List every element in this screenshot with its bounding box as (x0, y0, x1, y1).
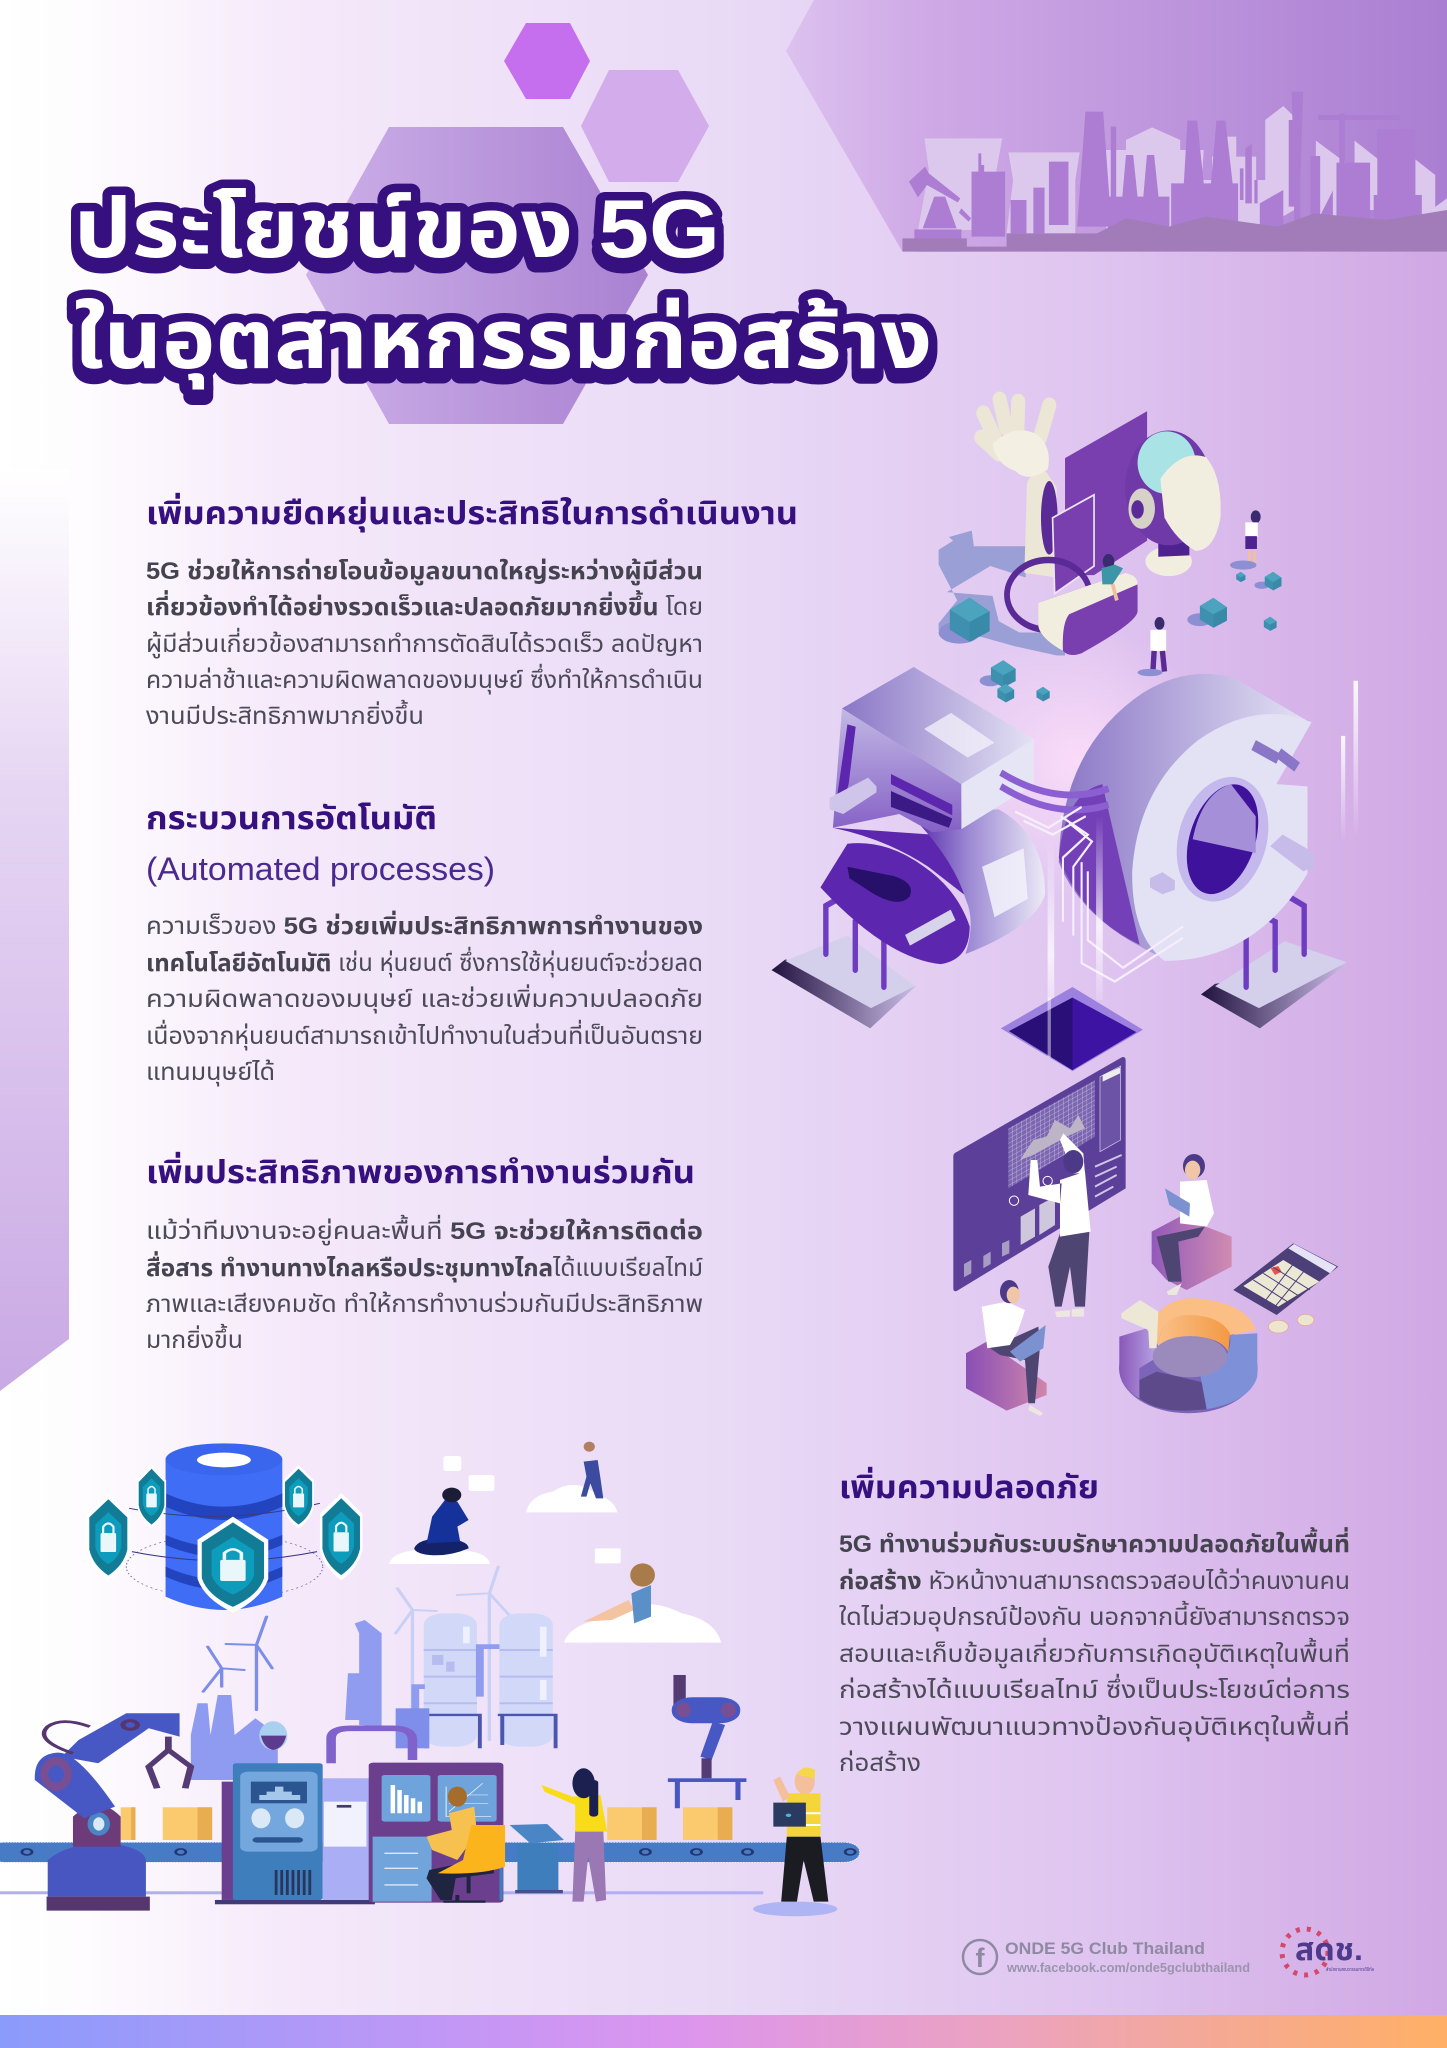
section 3 body: มากยิ่งขึ้น (146, 1323, 243, 1354)
top-right corner panel (786, 0, 1447, 251)
section 2 heading: กระบวนการอัตโนมัติ (146, 800, 437, 836)
security database with shields (87, 1443, 363, 1613)
worker with laptop (753, 1768, 837, 1916)
shadow of robot hand (939, 531, 1065, 656)
section 3 body: ภาพและเสียงคมชัด ทำให้การทำงานร่วมกันมีประสิทธิภาพ (146, 1290, 703, 1318)
section 4 body: ก่อสร้าง หัวหน้างานสามารถตรวจสอบได้ว่าคนงานคน (839, 1567, 1350, 1595)
section 3 body: แม้ว่าทีมงานจะอยู่คนละพื้นที่ 5G จะช่วยให้การติดต่อ (146, 1214, 703, 1246)
distillation tower (345, 1620, 382, 1727)
cables and circuit traces between 5 and G (1001, 773, 1183, 982)
title (74, 182, 932, 390)
section 4 body (839, 1527, 1350, 1777)
hexagon: pink (504, 23, 590, 99)
cardboard boxes (121, 1807, 732, 1840)
section 4 body: ก่อสร้างได้แบบเรียลไทม์ ซึ่งเป็นประโยชน์ต่อการ (839, 1673, 1350, 1704)
illustration: team with dashboard, calculator and pie chart (953, 1057, 1338, 1416)
logo: NBTC office: สำนักงานคณะกรรมการดิจิทัล (1326, 1966, 1374, 1973)
operator console (369, 1763, 503, 1903)
illustration: robot hand, AI head, VR headset and 5G blocks (772, 399, 1358, 1071)
left platform (772, 889, 916, 1028)
digit G (1059, 674, 1315, 961)
section 1 body: ความล่าช้าและความผิดพลาดของมนุษย์ ซึ่งทำให้การดำเนิน (146, 663, 703, 695)
icon: Facebook: f (976, 1943, 986, 1973)
section 2 body (146, 910, 703, 1087)
section 4 body: ก่อสร้าง (839, 1749, 921, 1777)
calculator (1233, 1243, 1338, 1315)
pit (1001, 987, 1143, 1071)
cloud with sitting man (389, 1456, 494, 1564)
robot arm left (35, 1713, 191, 1911)
section 3 heading: เพิ่มประสิทธิภาพของการทำงานร่วมกัน (146, 1151, 695, 1190)
cloud with sitting woman (564, 1548, 721, 1643)
skyline silhouette (902, 92, 1447, 252)
section 2 heading (146, 800, 495, 887)
seated man with laptop (966, 1280, 1047, 1416)
section 4 body: ใดไม่สวมอุปกรณ์ป้องกัน นอกจากนี้ยังสามารถตรวจ (839, 1600, 1350, 1632)
section 1 body: งานมีประสิทธิภาพมากยิ่งขึ้น (146, 699, 424, 730)
footer: Facebook credit: www.facebook.com/onde5gclubthailand (1006, 1960, 1250, 1975)
AI head with brain (1125, 431, 1221, 576)
section 3 body: สื่อสาร ทำงานทางไกลหรือประชุมทางไกล ได้แบบเรียลไทม์ (146, 1251, 703, 1283)
section 1 body (146, 557, 703, 730)
standing man (1028, 1133, 1091, 1317)
section 4 body: สอบและเก็บข้อมูลเกี่ยวกับการเกิดอุบัติเหตุในพื้นที่ (839, 1637, 1350, 1669)
person with tablet (1230, 510, 1261, 570)
section 1 body: 5G ช่วยให้การถ่ายโอนข้อมูลขนาดใหญ่ระหว่างผู้มีส่วน (146, 557, 703, 586)
logo: NBTC office (1282, 1929, 1374, 1975)
bottom gradient bar (0, 2015, 1447, 2048)
section 1 body: ผู้มีส่วนเกี่ยวข้องสามารถทำการตัดสินได้รวดเร็ว ลดปัญหา (146, 627, 703, 659)
hexagon: light purple (581, 70, 709, 182)
section 1 heading: เพิ่มความยืดหยุ่นและประสิทธิในการดำเนินงาน (146, 492, 798, 532)
section 2 heading: (Automated processes) (146, 851, 495, 887)
woman pointing (542, 1768, 607, 1902)
hexagon: large (306, 127, 648, 424)
seated woman with tablet (1152, 1154, 1232, 1295)
control machine (215, 1728, 412, 1904)
title: ประโยชน์ของ 5G (74, 182, 720, 275)
robot arm and hand (981, 399, 1058, 577)
conveyor belt (0, 1842, 860, 1862)
gripper robot right (668, 1675, 746, 1808)
section 4 heading: เพิ่มความปลอดภัย (839, 1466, 1099, 1505)
logo: NBTC office: สดช. (1295, 1932, 1363, 1967)
left gradient strip (0, 470, 69, 1391)
footer: Facebook credit (963, 1939, 1250, 1975)
section 4 body: วางแผนพัฒนาแนวทางป้องกันอุบัติเหตุในพื้นที่ (839, 1710, 1350, 1742)
VR headset (1007, 560, 1138, 655)
illustration: smart factory and data security (0, 1442, 860, 1916)
section 2 body: เนื่องจากหุ่นยนต์สามารถเข้าไปทำงานในส่วนที่เป็นอันตราย (146, 1019, 703, 1051)
small purple tablet (1053, 495, 1094, 594)
person with phone (1138, 617, 1166, 676)
section 1 body: เกี่ยวข้องทำได้อย่างรวดเร็วและปลอดภัยมากยิ่งขึ้น โดย (146, 590, 703, 621)
title: ในอุตสาหกรรมก่อสร้าง (74, 293, 932, 390)
digit 5 (820, 667, 1045, 964)
pie chart sign (259, 1721, 287, 1750)
section 2 body: แทนมนุษย์ได้ (146, 1059, 275, 1087)
section 2 body: ความผิดพลาดของมนุษย์ และช่วยเพิ่มความปลอดภัย (146, 983, 703, 1014)
large purple tablet (1065, 411, 1147, 575)
kiosk terminal (510, 1824, 564, 1893)
data dashboard screen (953, 1057, 1126, 1291)
right platform (1201, 889, 1347, 1028)
donut chart (1119, 1298, 1258, 1413)
floor line (0, 1891, 763, 1894)
wind turbines (203, 1567, 511, 1740)
light beams (1048, 681, 1358, 1032)
background factory (191, 1695, 278, 1780)
footer: Facebook credit: ONDE 5G Club Thailand (1005, 1939, 1205, 1958)
section 4 body: 5G ทำงานร่วมกับระบบรักษาความปลอดภัยในพื้นที่ (839, 1527, 1350, 1558)
section 2 body: ความเร็วของ 5G ช่วยเพิ่มประสิทธิภาพการทำงานของ (146, 910, 703, 940)
seated person on headset (1101, 554, 1123, 600)
cloud with standing person (526, 1442, 617, 1512)
seated engineer (427, 1787, 505, 1902)
floating cubes (939, 572, 1281, 702)
section 2 body: เทคโนโลยีอัตโนมัติ เช่น หุ่นยนต์ ซึ่งการใช้หุ่นยนต์จะช่วยลด (146, 946, 703, 978)
section 3 body (146, 1214, 703, 1354)
icon: Facebook (963, 1940, 997, 1974)
storage tanks (396, 1613, 556, 1748)
coins (1268, 1314, 1314, 1333)
